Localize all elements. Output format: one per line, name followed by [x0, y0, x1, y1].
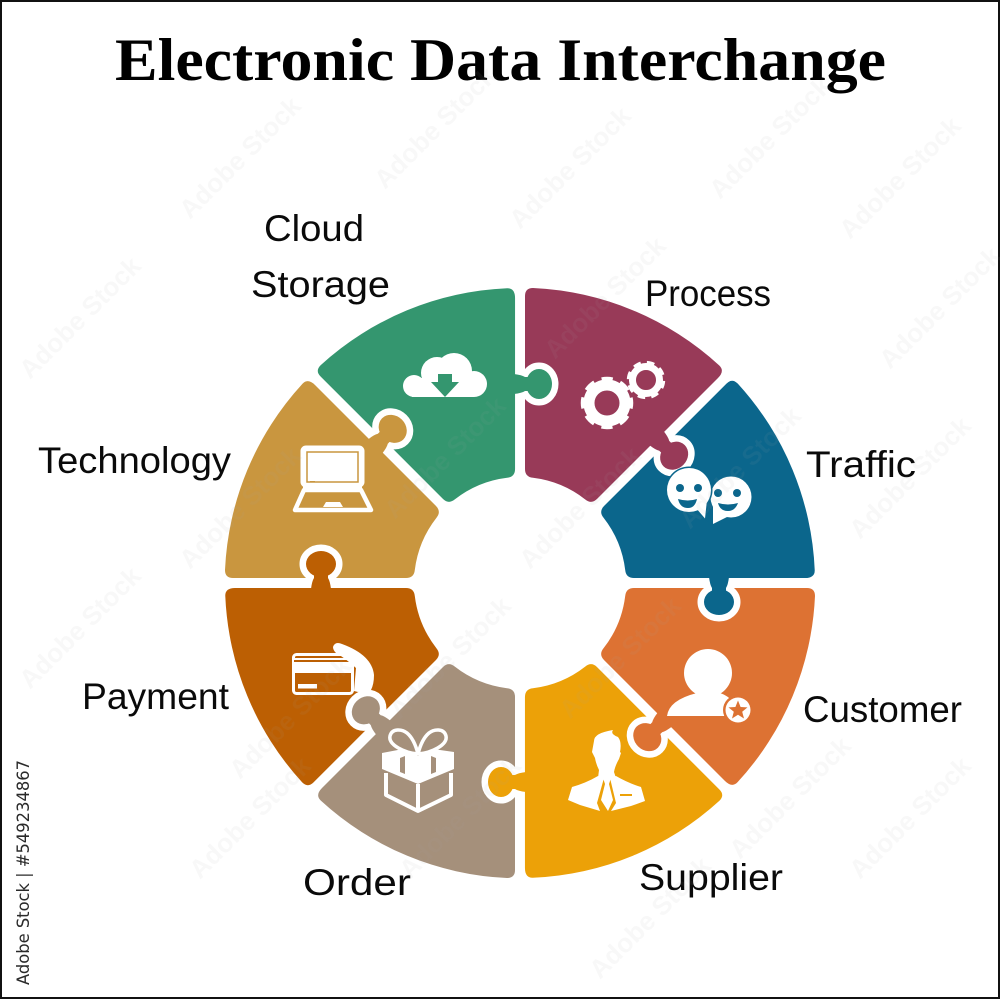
- watermark: Adobe Stock: [583, 850, 717, 984]
- label: technology: Technology: [38, 440, 232, 481]
- icon: gift box: [382, 730, 454, 811]
- watermark: Adobe Stock: [703, 70, 837, 204]
- panel: payment segment: [169, 498, 459, 788]
- watermark: Adobe Stock: [183, 750, 317, 884]
- panel: technology segment: [225, 381, 439, 578]
- puzzle tab: process into traffic: [650, 432, 695, 476]
- icon: supplier businessman: [568, 730, 645, 811]
- label: order: Order: [303, 862, 411, 903]
- panel: order segment: [318, 664, 515, 878]
- icon: cloud download: [403, 353, 487, 397]
- watermark: Adobe Stock: [723, 730, 857, 864]
- icon: smiley chat bubbles: [666, 466, 752, 524]
- puzzle ring: [225, 288, 815, 878]
- watermark: Adobe Stock: [553, 590, 687, 724]
- panel: process segment: [525, 288, 722, 502]
- icon: laptop: [295, 447, 371, 510]
- watermark: Adobe Stock: [393, 750, 527, 884]
- watermark: Adobe Stock: [368, 60, 502, 194]
- panel: supplier segment: [435, 644, 725, 934]
- puzzle tab: payment into technology: [306, 551, 336, 589]
- watermark: Adobe Stock: [513, 440, 647, 574]
- label: cloud storage: Cloud: [264, 208, 364, 249]
- watermark: Adobe Stock: [843, 750, 977, 884]
- icon: gears: [583, 359, 667, 427]
- label: payment: Payment: [82, 676, 230, 717]
- panel: traffic segment: [581, 378, 871, 668]
- icon: customer with star: [667, 649, 753, 725]
- panel: customer segment: [601, 588, 815, 785]
- watermark: Adobe Stock: [223, 650, 357, 784]
- label: process: Process: [645, 273, 771, 314]
- puzzle tab: traffic into customer: [704, 577, 734, 615]
- puzzle tab: cloud storage into process: [514, 369, 552, 399]
- watermark: Adobe Stock: [13, 250, 147, 384]
- watermark: Adobe Stock: [173, 440, 307, 574]
- watermark: Adobe Stock: [843, 410, 977, 544]
- label: supplier: Supplier: [639, 857, 783, 898]
- watermark: Adobe Stock: [378, 390, 512, 524]
- watermark: Adobe Stock: [383, 590, 517, 724]
- label: customer: Customer: [803, 689, 962, 730]
- puzzle tab: technology into cloud storage: [368, 408, 414, 453]
- watermark: Adobe Stock: [503, 100, 637, 234]
- label: cloud storage: Storage: [251, 264, 390, 305]
- watermark: Adobe Stock: [833, 110, 967, 244]
- stock credit: Adobe Stock | #549234867: [14, 760, 34, 985]
- puzzle tab: order into payment: [345, 690, 390, 734]
- watermark: Adobe Stock: [173, 90, 307, 224]
- puzzle tab: customer into supplier: [626, 713, 672, 758]
- label: cloud storage: [251, 208, 390, 305]
- panel: cloud storage segment: [315, 232, 605, 522]
- icon: payment card and hand: [294, 643, 374, 694]
- watermark: Adobe Stock: [673, 400, 807, 534]
- watermark: Adobe Stock: [538, 230, 672, 364]
- label: traffic: Traffic: [806, 444, 916, 485]
- puzzle tab: supplier into order: [488, 767, 526, 797]
- watermark: Adobe Stock: [13, 560, 147, 694]
- title: Electronic Data Interchange: [115, 27, 886, 93]
